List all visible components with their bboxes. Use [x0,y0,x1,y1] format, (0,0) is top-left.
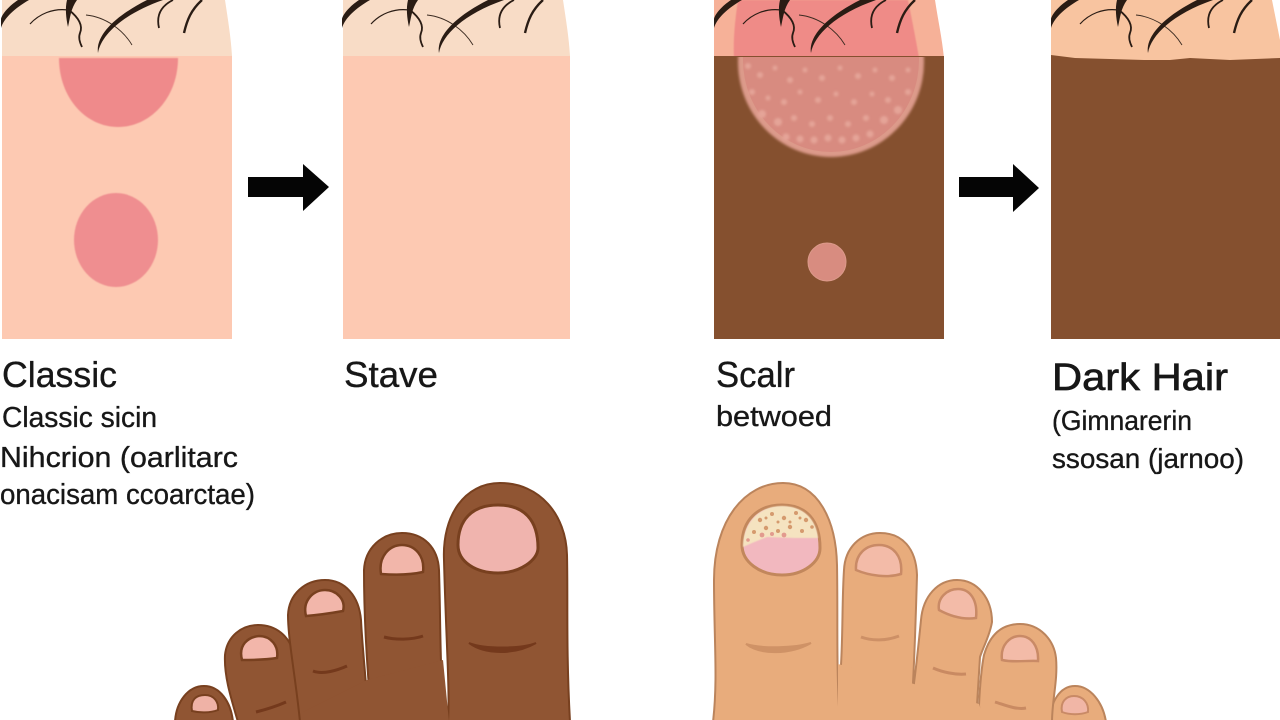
line: betwoed: betwoed [716,401,832,433]
foot base [303,660,449,720]
text block: dark hair [1052,357,1244,474]
panel: classic skin [1,0,232,339]
fourth toe [979,624,1056,720]
nail base [742,505,820,575]
brown skin [1051,55,1280,339]
arrow: scalp to dark hair [959,164,1039,212]
upper red patch [59,58,178,127]
heading: Stave: Stave [344,354,438,395]
red scalp patch [734,0,919,58]
line: description two: onacisam ccoarctae) [0,479,255,511]
upper scalp band [714,0,944,58]
line: description one: Nihcrion (oarlitarc [0,442,238,474]
line: Classic skin: Classic sicin [2,402,157,434]
panel: dark hair [1051,0,1280,339]
lower skin [343,56,570,339]
lower red patch [74,193,158,287]
small patch [808,243,846,281]
lower skin [2,56,232,339]
third toe [912,580,992,720]
panel: stave [342,0,570,339]
illustration: dark foot [175,483,570,720]
hairs [342,0,543,53]
large textured patch [736,57,926,158]
little toe [1050,686,1106,720]
heading: Scalr: Scalr [716,354,795,395]
hairs [1051,0,1252,53]
line: description one: (Gimnarerin [1052,405,1192,436]
fourth toe [225,625,302,720]
heading: Classic: Classic [2,354,117,395]
text block: classic [0,354,255,511]
line: description two: ssosan (jarnoo) [1052,443,1244,474]
second toe [838,533,917,720]
third toe [288,580,372,720]
big toe [444,483,570,720]
big toe with crumbling nail [713,483,840,720]
hairs [1,0,202,53]
panel: scalp on dark skin [714,0,944,339]
heading: Dark Hair: Dark Hair [1052,357,1228,399]
crumbling white area [743,506,818,547]
scalp band [1051,0,1280,62]
little toe [175,686,233,720]
upper scalp band [343,0,570,56]
text block: scalr [716,354,832,433]
brown skin [714,56,944,339]
hairs [714,0,915,53]
nail speckles [746,511,814,542]
second toe [364,533,444,720]
arrow: classic to stave [248,164,329,211]
upper scalp band [2,0,232,56]
foot base [838,664,985,720]
illustration: light foot with affected nail [713,483,1106,720]
